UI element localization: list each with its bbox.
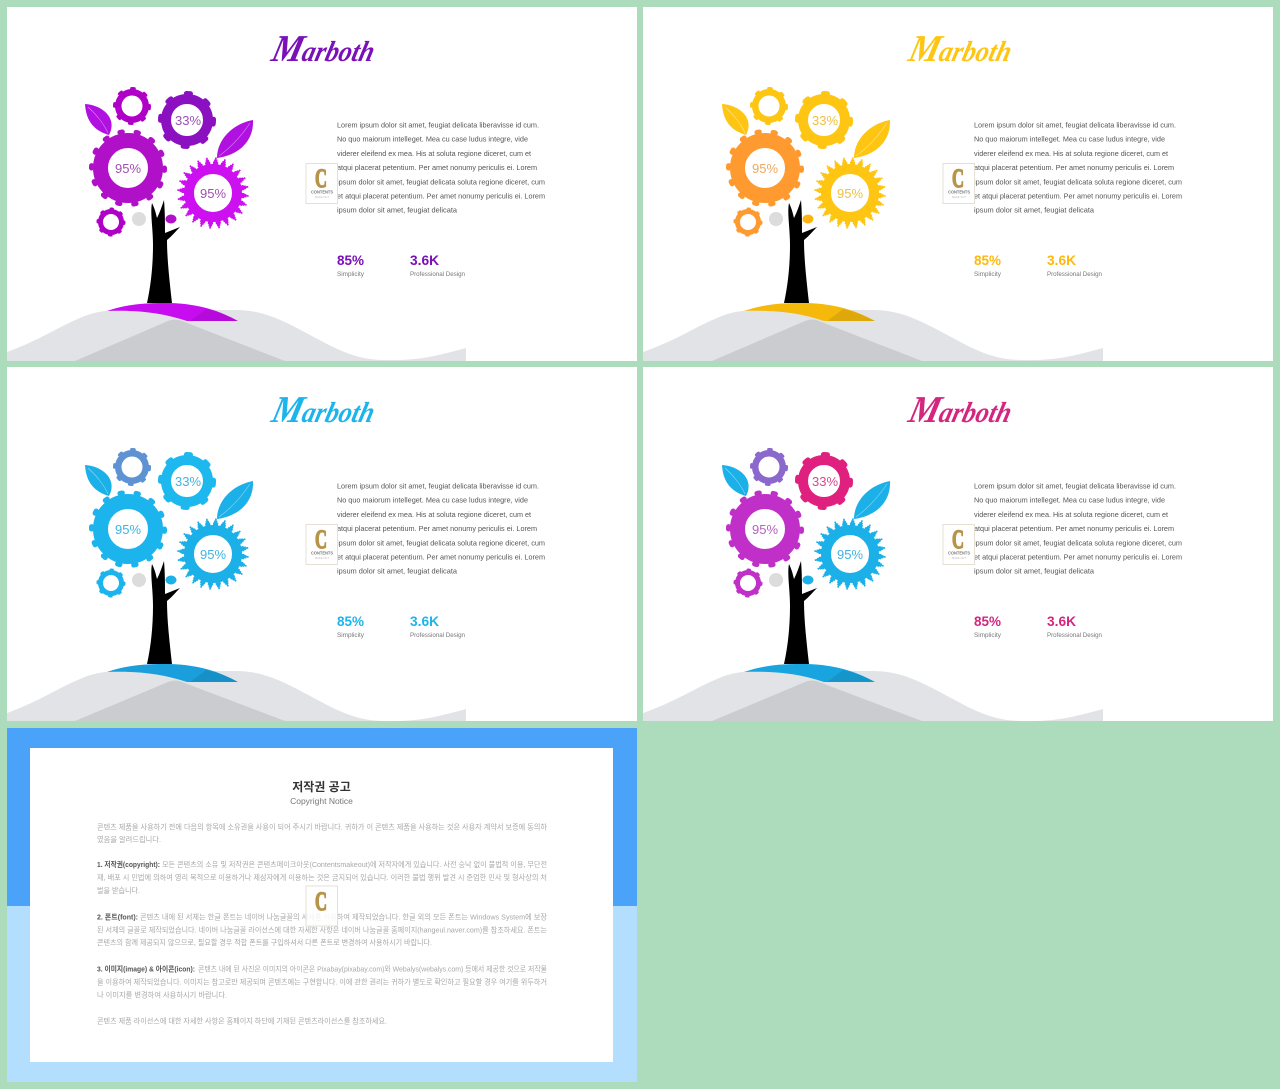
gear 95% left	[92, 132, 164, 204]
stat: professional design	[1047, 613, 1102, 639]
stat: simplicity: 85%	[337, 613, 365, 629]
leaf right	[217, 120, 253, 158]
stat: professional design: Professional Design	[410, 632, 465, 639]
gear 95% right: 95%	[200, 547, 226, 562]
body text: viderer eleifend ex mea. His at soluta regione diceret, cum et	[974, 510, 1168, 519]
stat: professional design	[410, 252, 465, 278]
logo watermark: MAKE OUT	[315, 195, 329, 199]
body text: et atqui placerat petentium. Per amet nonumy periculis ei. Lorem	[337, 552, 545, 562]
section 2: font: 된 서체의 글꼴로 제작되었습니다. 네이버 나눔글꼴 라이선스에 대한 자세한 사항은 네이버 나눔글꼴 홈페이지(hangeul.naver.com)를 참조하세요. 폰트는	[97, 924, 547, 934]
body text: ipsum dolor sit amet, feugiat delicata	[337, 206, 458, 215]
body text: viderer eleifend ex mea. His at soluta regione diceret, cum et	[974, 149, 1168, 158]
stat: professional design	[410, 613, 465, 639]
logo watermark: C	[315, 164, 327, 193]
dot accent	[802, 214, 814, 224]
gear 33%: 33%	[175, 113, 201, 128]
body text: ipsum dolor sit amet, feugiat delicata	[974, 206, 1095, 215]
gear 95% left: 95%	[752, 522, 778, 537]
logo watermark	[306, 524, 338, 564]
title: Marboth	[267, 29, 380, 70]
body text: atqui placerat petentium. Per amet nonumy periculis ei. Lorem	[974, 524, 1174, 533]
body text: ipsum dolor sit amet, feugiat delicata soluta regione diceret, cum	[337, 538, 545, 547]
logo watermark: MAKE OUT	[315, 556, 329, 560]
body text: ipsum dolor sit amet, feugiat delicata soluta regione diceret, cum	[337, 177, 545, 186]
gear 95% left	[92, 492, 164, 566]
hills	[7, 664, 466, 721]
panel: purple tree slide	[7, 7, 637, 361]
gear 95% left	[728, 132, 802, 204]
dot grey	[769, 573, 783, 587]
tree trunk	[147, 561, 180, 664]
panel: blue tree slide	[7, 367, 637, 721]
section 2: font: 2. 폰트(font):	[97, 912, 138, 922]
dot grey	[769, 212, 783, 226]
dot grey	[132, 212, 146, 226]
gear small top	[114, 88, 150, 124]
stat: professional design: Professional Design	[410, 271, 465, 278]
intro text	[97, 822, 547, 844]
body text: atqui placerat petentium. Per amet nonumy periculis ei. Lorem	[337, 524, 537, 533]
gear 33%: 33%	[812, 474, 838, 489]
dot accent	[166, 576, 176, 584]
hills	[643, 303, 1103, 361]
leaf right	[854, 120, 890, 158]
gear small top	[114, 450, 150, 484]
body text: Lorem ipsum dolor sit amet, feugiat delicata liberavisse id cum.	[974, 120, 1176, 130]
logo watermark	[943, 524, 974, 564]
gear 95% right: 95%	[837, 547, 863, 562]
section 1: copyright	[97, 859, 547, 895]
section 3: image and icon: 을 이용하여 제작되었습니다. 이미지는 참고로만 제공되며 콘텐츠에는 구현합니다. 이에 관한 권리는 귀하가 별도로 확인하고 필요할 경우 여기를 위두하거	[97, 976, 547, 986]
body text: No quo maiorum intelleget. Mea cu case ludus integre, vide	[337, 135, 528, 144]
tree trunk	[784, 200, 817, 303]
stat: professional design: 3.6K	[410, 613, 439, 629]
section 3: image and icon: 콘텐츠 내에 된 사진은 이미지의 아이콘은 Pixabay(pixabay.com)와 Webalys(webalys.com) 등에서 제공한 것으로 저작물	[198, 964, 547, 974]
logo watermark	[943, 164, 974, 204]
title: Marboth	[904, 390, 1017, 431]
gear 95% left: 95%	[115, 161, 141, 176]
body text: ipsum dolor sit amet, feugiat delicata soluta regione diceret, cum	[974, 177, 1182, 186]
body text: Lorem ipsum dolor sit amet, feugiat delicata liberavisse id cum.	[337, 120, 539, 130]
dot accent	[802, 576, 814, 584]
stat: professional design: Professional Design	[1047, 632, 1102, 639]
tree trunk	[147, 200, 180, 303]
section 2: font: 콘텐츠 내에 된 서체는 한글 폰트는 네이버 나눔글꼴의 서체를 이용하여 제작되었습니다. 한글 외의 모든 폰트는 Windows System에 보장	[140, 912, 547, 922]
gear small bottom	[98, 209, 124, 235]
leaf left	[85, 104, 112, 135]
panel: yellow tree slide	[643, 7, 1273, 361]
title: Marboth	[904, 29, 1017, 70]
leaf right	[217, 481, 253, 519]
stat: professional design: 3.6K	[1047, 613, 1076, 629]
intro text: 였음을 알려드립니다.	[97, 834, 161, 844]
stat: simplicity: Simplicity	[337, 632, 365, 639]
panel: copyright notice slide	[7, 728, 637, 1082]
body text: ipsum dolor sit amet, feugiat delicata soluta regione diceret, cum	[974, 538, 1182, 547]
body text	[974, 120, 1182, 215]
gear 95% left: 95%	[115, 522, 141, 537]
gear small bottom	[735, 209, 761, 235]
body text: Lorem ipsum dolor sit amet, feugiat delicata liberavisse id cum.	[337, 482, 539, 490]
gear 95% right	[816, 520, 884, 588]
logo watermark: C	[315, 887, 327, 916]
body text: Lorem ipsum dolor sit amet, feugiat delicata liberavisse id cum.	[974, 482, 1176, 490]
section 3: image and icon	[97, 964, 547, 1000]
heading: copyright notice: 저작권 공고	[292, 779, 351, 794]
section 3: image and icon: 나 이미지를 변경하여 사용하시기 바랍니다.	[97, 990, 227, 1000]
gear 95% left	[728, 492, 802, 566]
gear 33%	[798, 94, 850, 146]
stat: simplicity	[337, 613, 365, 639]
leaf left	[722, 465, 749, 496]
gear 33%: 33%	[812, 113, 838, 128]
body text: viderer eleifend ex mea. His at soluta regione diceret, cum et	[337, 149, 531, 158]
logo watermark: C	[952, 164, 964, 193]
stat: simplicity: 85%	[974, 252, 1002, 268]
stat: professional design: 3.6K	[1047, 252, 1076, 268]
gear 33%	[160, 454, 214, 508]
heading: copyright notice	[290, 779, 353, 806]
logo watermark: C	[315, 525, 327, 554]
logo watermark: CONTENTS	[311, 190, 333, 194]
logo watermark: CONTENTS	[948, 550, 970, 556]
hills	[7, 303, 466, 361]
gear 95% right	[816, 158, 884, 228]
section 1: copyright: 재, 배포 시 민법에 의하여 영리 목적으로 이용하거나 제삼자에게 이용하는 것은 금지되어 있습니다. 이러한 불법 행위 발견 시 준엄한 민사 및 형사상의 처	[97, 872, 547, 882]
stat: simplicity: 85%	[337, 252, 365, 268]
gear 33%	[160, 94, 214, 146]
stat: simplicity	[974, 252, 1002, 278]
intro text: 콘텐츠 제품을 사용하기 전에 다음의 항목에 소유권을 사용이 되어 주시기 바랍니다. 귀하가 이 콘텐츠 제품을 사용하는 것은 사용자 계약서 보증에 동의하	[97, 822, 547, 832]
body text: viderer eleifend ex mea. His at soluta regione diceret, cum et	[337, 510, 531, 519]
body text: et atqui placerat petentium. Per amet nonumy periculis ei. Lorem	[974, 552, 1182, 562]
stat: simplicity: Simplicity	[974, 632, 1002, 639]
gear small top	[752, 88, 786, 124]
dot accent	[166, 214, 176, 224]
heading: copyright notice: Copyright Notice	[290, 796, 353, 806]
section 1: copyright: 1. 저작권(copyright):	[97, 859, 160, 869]
body text: ipsum dolor sit amet, feugiat delicata	[337, 567, 458, 576]
leaf right	[854, 481, 890, 519]
stat: simplicity	[974, 613, 1002, 639]
title: Marboth	[267, 390, 380, 431]
tree trunk	[784, 561, 817, 664]
logo watermark: MAKE OUT	[952, 195, 966, 199]
stat: simplicity: Simplicity	[974, 271, 1002, 278]
section 1: copyright: 모든 콘텐츠의 소유 및 저작권은 콘텐츠메이크아웃(Contentsmakeout)에 저작자에게 있습니다. 사전 승낙 없이 불법적 이용, 무단전	[162, 859, 547, 869]
stat: professional design: 3.6K	[410, 252, 439, 268]
logo watermark	[306, 164, 338, 204]
body text: atqui placerat petentium. Per amet nonumy periculis ei. Lorem	[974, 163, 1174, 172]
logo watermark: C	[952, 525, 964, 554]
gear 95% right	[178, 520, 248, 588]
gear 95% right	[178, 158, 248, 228]
panel: magenta tree slide	[643, 367, 1273, 721]
hills	[643, 664, 1103, 721]
gear 95% right: 95%	[200, 186, 226, 201]
stat: professional design: Professional Design	[1047, 271, 1102, 278]
dot grey	[132, 573, 146, 587]
logo watermark: CONTENTS	[948, 190, 970, 194]
body text	[337, 120, 545, 215]
stat: simplicity	[337, 252, 365, 278]
gear 33%	[798, 454, 850, 508]
body text: et atqui placerat petentium. Per amet nonumy periculis ei. Lorem	[337, 192, 545, 200]
logo watermark: MAKE OUT	[952, 556, 966, 560]
stat: simplicity: Simplicity	[337, 271, 365, 278]
gear 95% right: 95%	[837, 186, 863, 201]
stat: professional design	[1047, 252, 1102, 278]
section 3: image and icon: 3. 이미지(image) & 아이콘(icon):	[97, 964, 195, 974]
body text	[337, 482, 545, 576]
gear small bottom	[98, 570, 124, 596]
gear 95% left: 95%	[752, 161, 778, 176]
body text: atqui placerat petentium. Per amet nonumy periculis ei. Lorem	[337, 163, 537, 172]
leaf left	[85, 465, 112, 496]
section 2: font: 콘텐츠의 함께 제공되지 않으므로, 필요할 경우 적합 폰트를 구입하셔서 다른 폰트로 변경하여 사용하시기 바랍니다.	[97, 937, 432, 947]
body text	[974, 482, 1182, 576]
body text: ipsum dolor sit amet, feugiat delicata	[974, 567, 1095, 576]
stat: simplicity: 85%	[974, 613, 1002, 629]
gear small bottom	[735, 570, 761, 596]
body text: No quo maiorum intelleget. Mea cu case ludus integre, vide	[337, 496, 528, 505]
body text: et atqui placerat petentium. Per amet nonumy periculis ei. Lorem	[974, 192, 1182, 200]
gear small top	[752, 450, 786, 484]
gear 33%: 33%	[175, 474, 201, 489]
body text: No quo maiorum intelleget. Mea cu case ludus integre, vide	[974, 135, 1165, 144]
section 1: copyright: 벌을 받습니다.	[97, 885, 140, 895]
leaf left	[722, 104, 749, 135]
section 2: font	[97, 912, 547, 947]
logo watermark	[306, 886, 338, 926]
logo watermark: CONTENTS	[311, 550, 333, 556]
closing note: 콘텐츠 제품 라이선스에 대한 자세한 사항은 홈페이지 하단에 기재된 콘텐츠라이선스를 참조하세요.	[97, 1016, 387, 1026]
body text: No quo maiorum intelleget. Mea cu case ludus integre, vide	[974, 496, 1165, 505]
